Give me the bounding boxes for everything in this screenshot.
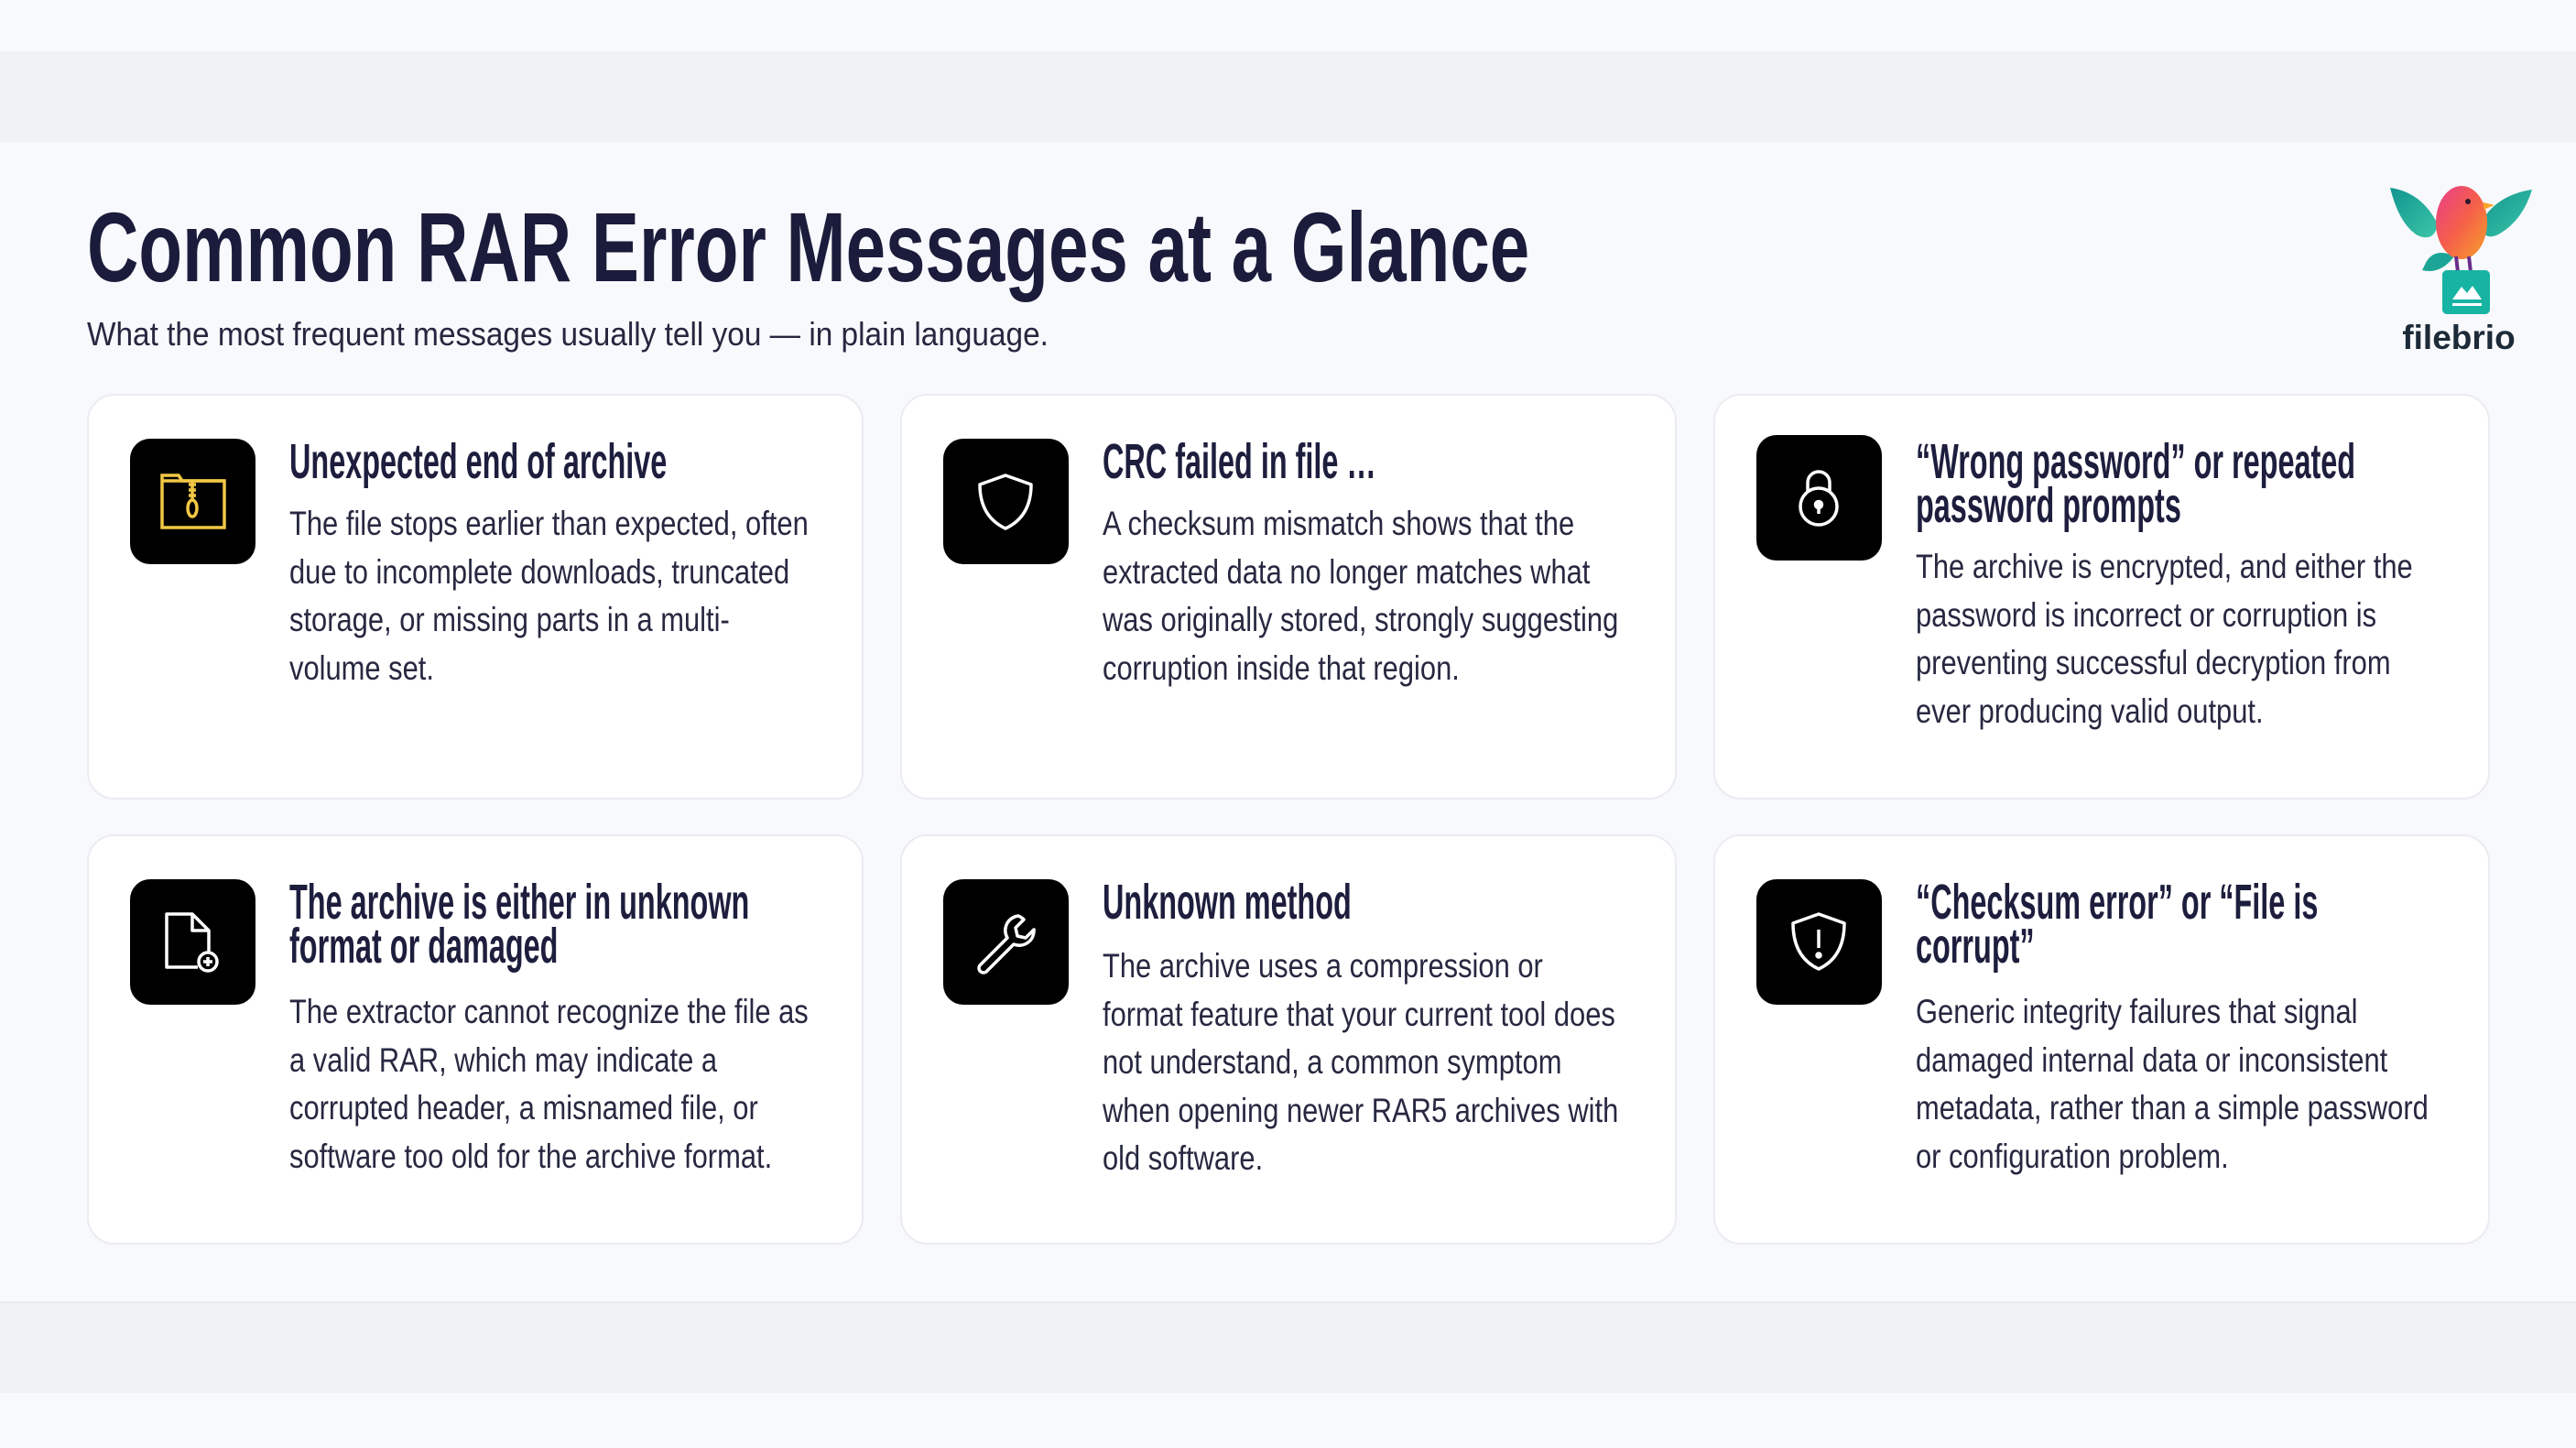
- icon: zipped folder: [130, 439, 255, 564]
- heading: format or damaged: [289, 919, 558, 974]
- body text: [1916, 548, 2413, 729]
- body text: software too old for the archive format.: [289, 1138, 772, 1174]
- body text: format feature that your current tool does: [1103, 995, 1615, 1033]
- icon: shield alert: [1756, 879, 1882, 1005]
- body text: [289, 993, 809, 1174]
- logo: filebrio: filebrio: [2402, 319, 2516, 356]
- body text: corruption inside that region.: [1103, 648, 1460, 687]
- body text: a valid RAR, which may indicate a: [289, 1040, 717, 1079]
- body text: [1103, 505, 1618, 687]
- heading: Unknown method: [1103, 875, 1352, 930]
- title: Common RAR Error Messages at a Glance: [87, 191, 1529, 302]
- body text: extracted data no longer matches what: [1103, 553, 1590, 590]
- heading: [1916, 875, 2318, 974]
- panel: CRC failed: [900, 394, 1677, 800]
- body text: The archive uses a compression or: [1103, 947, 1543, 985]
- body text: corrupted header, a misnamed file, or: [289, 1089, 758, 1127]
- panel: checksum error: [1713, 834, 2490, 1245]
- heading: [1916, 434, 2355, 533]
- body text: [1916, 993, 2429, 1174]
- heading: Unexpected end of archive: [289, 434, 667, 489]
- icon: padlock: [1756, 435, 1882, 561]
- body text: [1103, 947, 1618, 1177]
- icon: file plus: [130, 879, 255, 1005]
- icon: shield: [943, 439, 1069, 564]
- body text: ever producing valid output.: [1916, 692, 2264, 729]
- body text: The file stops earlier than expected, often: [289, 505, 809, 542]
- body text: not understand, a common symptom: [1103, 1043, 1561, 1081]
- body text: The archive is encrypted, and either the: [1916, 548, 2413, 585]
- panel: unexpected end of archive: [87, 394, 864, 800]
- body text: due to incomplete downloads, truncated: [289, 553, 789, 590]
- body text: [289, 505, 809, 687]
- body text: when opening newer RAR5 archives with: [1103, 1092, 1618, 1128]
- body text: The extractor cannot recognize the file as: [289, 993, 809, 1030]
- body text: was originally stored, strongly suggesting: [1103, 601, 1618, 638]
- body text: metadata, rather than a simple password: [1916, 1089, 2429, 1127]
- heading: [289, 875, 749, 974]
- body text: damaged internal data or inconsistent: [1916, 1040, 2387, 1079]
- panel: wrong password: [1713, 394, 2490, 800]
- logo: filebrio: [2390, 186, 2532, 356]
- body text: preventing successful decryption from: [1916, 644, 2391, 681]
- heading: “Wrong password” or repeated: [1916, 434, 2355, 489]
- panel: unknown format: [87, 834, 864, 1245]
- body text: Generic integrity failures that signal: [1916, 993, 2358, 1030]
- body text: A checksum mismatch shows that the: [1103, 505, 1574, 542]
- heading: CRC failed in file …: [1103, 434, 1376, 489]
- body text: password is incorrect or corruption is: [1916, 595, 2376, 634]
- heading: The archive is either in unknown: [289, 875, 749, 930]
- icon: wrench: [943, 879, 1069, 1005]
- body text: old software.: [1103, 1139, 1263, 1177]
- heading: password prompts: [1916, 478, 2181, 533]
- body text: or configuration problem.: [1916, 1138, 2229, 1174]
- panel: unknown method: [900, 834, 1677, 1245]
- body text: volume set.: [289, 648, 434, 687]
- subtitle: What the most frequent messages usually tell you — in plain language.: [87, 315, 1049, 353]
- heading: “Checksum error” or “File is: [1916, 875, 2318, 930]
- heading: corrupt”: [1916, 919, 2035, 974]
- body text: storage, or missing parts in a multi-: [289, 601, 730, 638]
